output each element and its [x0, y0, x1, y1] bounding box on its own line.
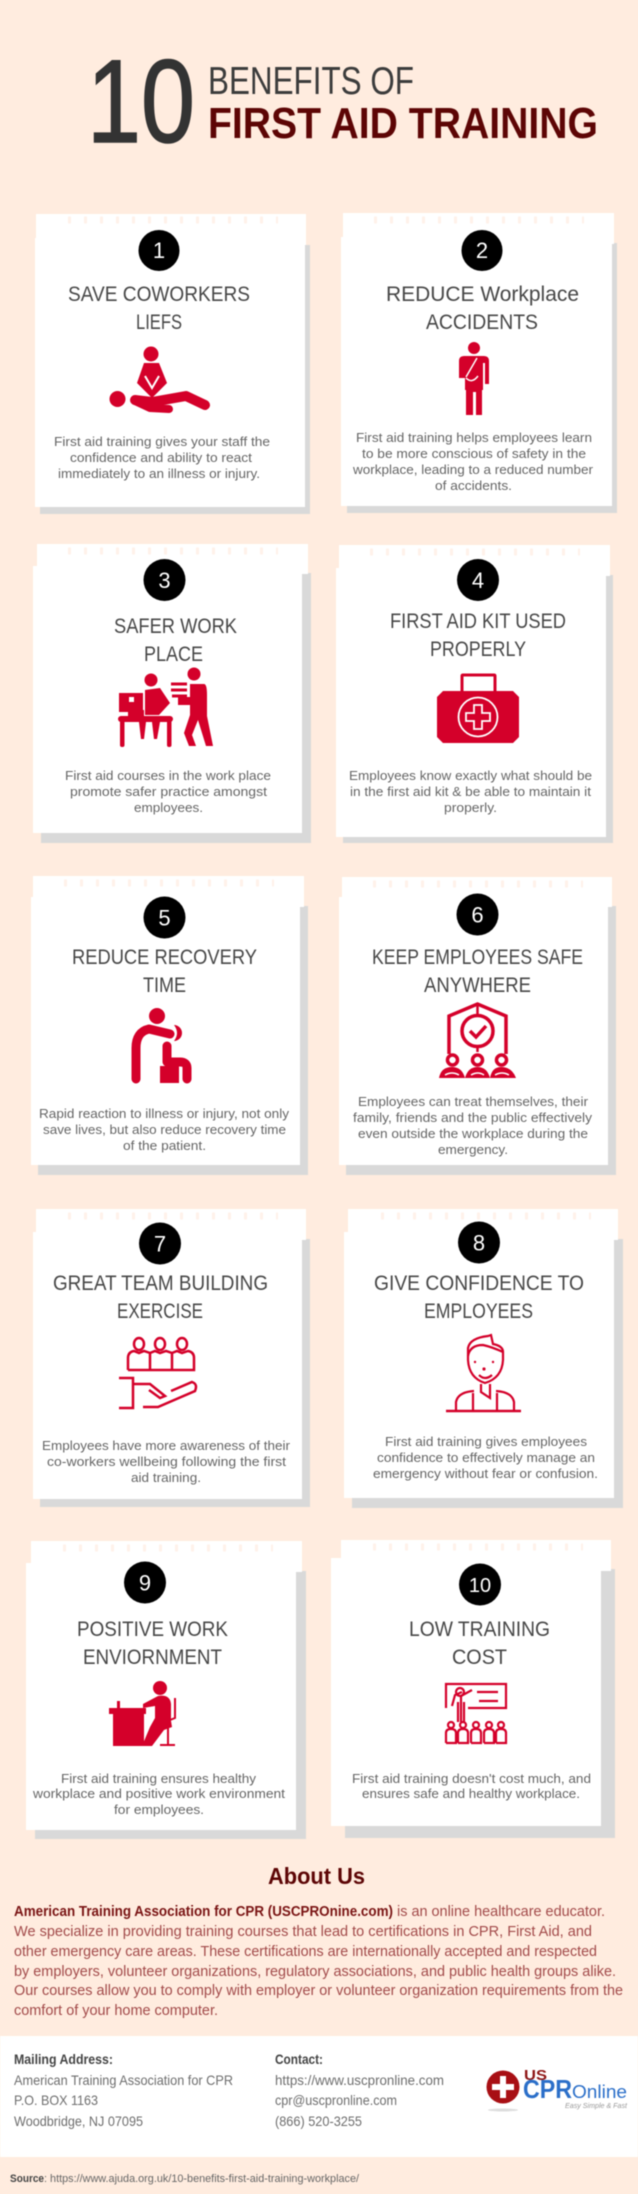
panel: benefit 1 [35, 214, 310, 514]
logo: US CPR Online: US [524, 2067, 547, 2084]
mailing address: American Training Association for CPR [14, 2072, 233, 2088]
body text 2 [352, 430, 594, 493]
heading 3 [114, 615, 237, 666]
mailing address: Woodbridge, NJ 07095 [14, 2113, 143, 2129]
heading 1 [68, 283, 250, 334]
panel: benefit 5 [31, 876, 308, 1175]
body text 2: First aid training helps employees learn [356, 430, 592, 445]
body text 10 [352, 1771, 591, 1801]
heading 9 [77, 1618, 228, 1669]
heading 7: GREAT TEAM BUILDING [53, 1272, 268, 1295]
number badge 9: 9 [139, 1570, 151, 1596]
title: FIRST AID TRAINING [208, 99, 598, 148]
number badge 1 [138, 230, 180, 271]
panel: benefit 7 [33, 1209, 310, 1507]
panel: benefit 4 [336, 545, 613, 843]
number badge 2 [462, 230, 502, 271]
body text 7: co-workers wellbeing following the first [47, 1454, 286, 1469]
heading 3: PLACE [144, 643, 203, 666]
title [87, 36, 598, 168]
body text 2: of accidents. [435, 478, 512, 493]
body text 2: workplace, leading to a reduced number [352, 462, 594, 477]
heading 8 [374, 1272, 584, 1323]
text block: about paragraph: is an online healthcare educator. [397, 1904, 605, 1920]
source line: Source [10, 2173, 44, 2185]
body text 8: First aid training gives employees [385, 1434, 588, 1449]
heading 8: GIVE CONFIDENCE TO [374, 1272, 584, 1295]
body text 4 [349, 768, 592, 815]
body text 1: immediately to an illness or injury. [58, 466, 260, 481]
heading 4: FIRST AID KIT USED [390, 610, 566, 633]
contact details: (866) 520-3255 [275, 2113, 362, 2129]
body text 9 [32, 1771, 285, 1817]
heading 4 [390, 610, 566, 661]
title: 10 [87, 36, 195, 168]
text block: about paragraph: American Training Association for CPR (USCPROnine.com) [14, 1904, 393, 1920]
number badge 6: 6 [471, 902, 484, 928]
number badge 10 [459, 1564, 501, 1606]
panel: benefit 9 [26, 1541, 306, 1839]
body text 3 [65, 768, 271, 815]
icon: instructor with class [446, 1684, 506, 1743]
number badge 7 [139, 1222, 181, 1264]
icon: CPR [110, 346, 205, 409]
number badge 3 [144, 559, 186, 601]
body text 6: family, friends and the public effectively [353, 1110, 593, 1125]
source line: : https://www.ajuda.org.uk/10-benefits-first-aid-training-workplace/ [44, 2173, 360, 2185]
body text 4: in the first aid kit & be able to maintain it [350, 784, 591, 799]
number badge 9 [124, 1562, 166, 1604]
number badge 1: 1 [153, 238, 165, 263]
title: BENEFITS OF [208, 60, 414, 103]
body text 6: even outside the workplace during the [358, 1126, 588, 1141]
panel: benefit 2 [341, 213, 617, 513]
body text 8 [373, 1434, 598, 1481]
icon: shield protecting people [439, 1004, 516, 1078]
panel: contact band [0, 2036, 638, 2157]
icon: person working at desk [109, 1681, 175, 1746]
body text 7 [42, 1438, 291, 1485]
number badge 2: 2 [476, 238, 488, 263]
contact details [275, 2051, 444, 2129]
heading 2: ACCIDENTS [426, 311, 538, 334]
number badge 5: 5 [158, 906, 171, 930]
number badge 4: 4 [472, 568, 484, 593]
text block: about paragraph: Our courses allow you to comply with employer or volunteer organization requirements from the [14, 1983, 623, 1999]
body text 6 [353, 1094, 593, 1157]
panel: benefit 8 [344, 1209, 623, 1508]
body text 4: Employees know exactly what should be [349, 768, 592, 783]
heading 6: KEEP EMPLOYEES SAFE [372, 946, 583, 969]
icon: injured person with sling [459, 342, 489, 415]
body text 3: First aid courses in the work place [65, 768, 271, 783]
body text 5: Rapid reaction to illness or injury, not only [39, 1106, 290, 1121]
icon: hand holding team [119, 1338, 196, 1408]
heading 5: TIME [143, 974, 186, 997]
body text 7: aid training. [131, 1470, 201, 1485]
text block: about paragraph: other emergency care areas. These certifications are internationally accepted and respected [14, 1944, 597, 1960]
number badge 4 [457, 559, 499, 601]
heading 9: POSITIVE WORK [77, 1618, 228, 1641]
heading 6: ANYWHERE [424, 974, 531, 997]
body text 9: First aid training ensures healthy [61, 1771, 257, 1786]
body text 6: emergency. [438, 1142, 508, 1157]
body text 9: for employees. [114, 1802, 204, 1817]
number badge 6 [456, 894, 498, 936]
heading 7 [53, 1272, 268, 1323]
text block: about paragraph: comfort of your home computer. [14, 2003, 218, 2019]
panel: benefit 10 [331, 1540, 615, 1838]
heading 6 [372, 946, 583, 997]
heading 3: SAFER WORK [114, 615, 237, 638]
heading 10 [409, 1618, 550, 1669]
body text 7: Employees have more awareness of their [42, 1438, 291, 1453]
icon: first aid kit [437, 675, 519, 743]
body text 10: ensures safe and healthy workplace. [362, 1786, 580, 1801]
number badge 5 [144, 896, 186, 938]
body text 6: Employees can treat themselves, their [358, 1094, 589, 1109]
body text 1: confidence and ability to react [70, 450, 252, 465]
heading 7: EXERCISE [117, 1300, 203, 1323]
heading 9: ENVIORNMENT [83, 1646, 222, 1669]
heading 1: SAVE COWORKERS [68, 283, 250, 306]
heading 10: COST [452, 1646, 507, 1669]
body text 10: First aid training doesn't cost much, and [352, 1771, 591, 1786]
body text 1 [54, 434, 270, 481]
mailing address: P.O. BOX 1163 [14, 2092, 98, 2108]
body text 2: to be more conscious of safety in the [362, 446, 586, 461]
icon: helping seated person [136, 1008, 187, 1083]
body text 5: of the patient. [123, 1138, 206, 1153]
body text 3: promote safer practice amongst [70, 784, 267, 799]
number badge 10: 10 [469, 1575, 491, 1597]
body text 4: properly. [444, 800, 497, 815]
number badge 7: 7 [154, 1232, 166, 1256]
heading 2 [386, 283, 579, 334]
contact details: cpr@uscpronline.com [275, 2092, 397, 2108]
heading 1: LIEFS [136, 311, 182, 334]
logo: US CPR Online: Easy Simple & Fast [565, 2103, 628, 2110]
body text 8: confidence to effectively manage an [377, 1450, 595, 1465]
number badge 8 [458, 1222, 500, 1264]
icon: coworkers at desk [118, 668, 213, 747]
mailing address: Mailing Address: [14, 2051, 113, 2067]
body text 5 [39, 1106, 290, 1153]
panel: benefit 6 [339, 877, 616, 1175]
heading: about us: About Us [268, 1863, 365, 1889]
number badge 8: 8 [473, 1230, 485, 1256]
contact details: Contact: [275, 2051, 323, 2067]
icon: confident man [446, 1335, 521, 1411]
body text 3: employees. [134, 800, 203, 815]
heading 4: PROPERLY [430, 638, 526, 661]
body text 8: emergency without fear or confusion. [373, 1466, 598, 1481]
heading 8: EMPLOYEES [424, 1300, 533, 1323]
logo: US CPR Online: Online [572, 2082, 627, 2102]
text block: about paragraph: by employers, volunteer organizations, regulatory associations, and public health groups alike. [14, 1964, 616, 1980]
text block: about paragraph: We specialize in providing training courses that lead to certifications in CPR, First Aid, and [14, 1924, 592, 1940]
logo: US CPR Online [486, 2067, 628, 2112]
heading 10: LOW TRAINING [409, 1618, 550, 1641]
body text 9: workplace and positive work environment [32, 1786, 285, 1801]
heading 5: REDUCE RECOVERY [72, 946, 257, 969]
logo: US CPR Online: CPR [523, 2074, 572, 2104]
body text 5: save lives, but also reduce recovery time [43, 1122, 286, 1137]
panel: benefit 3 [33, 544, 311, 843]
heading 2: REDUCE Workplace [386, 283, 579, 306]
heading 5 [72, 946, 257, 997]
contact details: https://www.uscpronline.com [275, 2072, 444, 2088]
number badge 3: 3 [158, 568, 171, 593]
body text 1: First aid training gives your staff the [54, 434, 270, 449]
text block: about paragraph [14, 1904, 623, 2019]
mailing address [14, 2051, 233, 2129]
